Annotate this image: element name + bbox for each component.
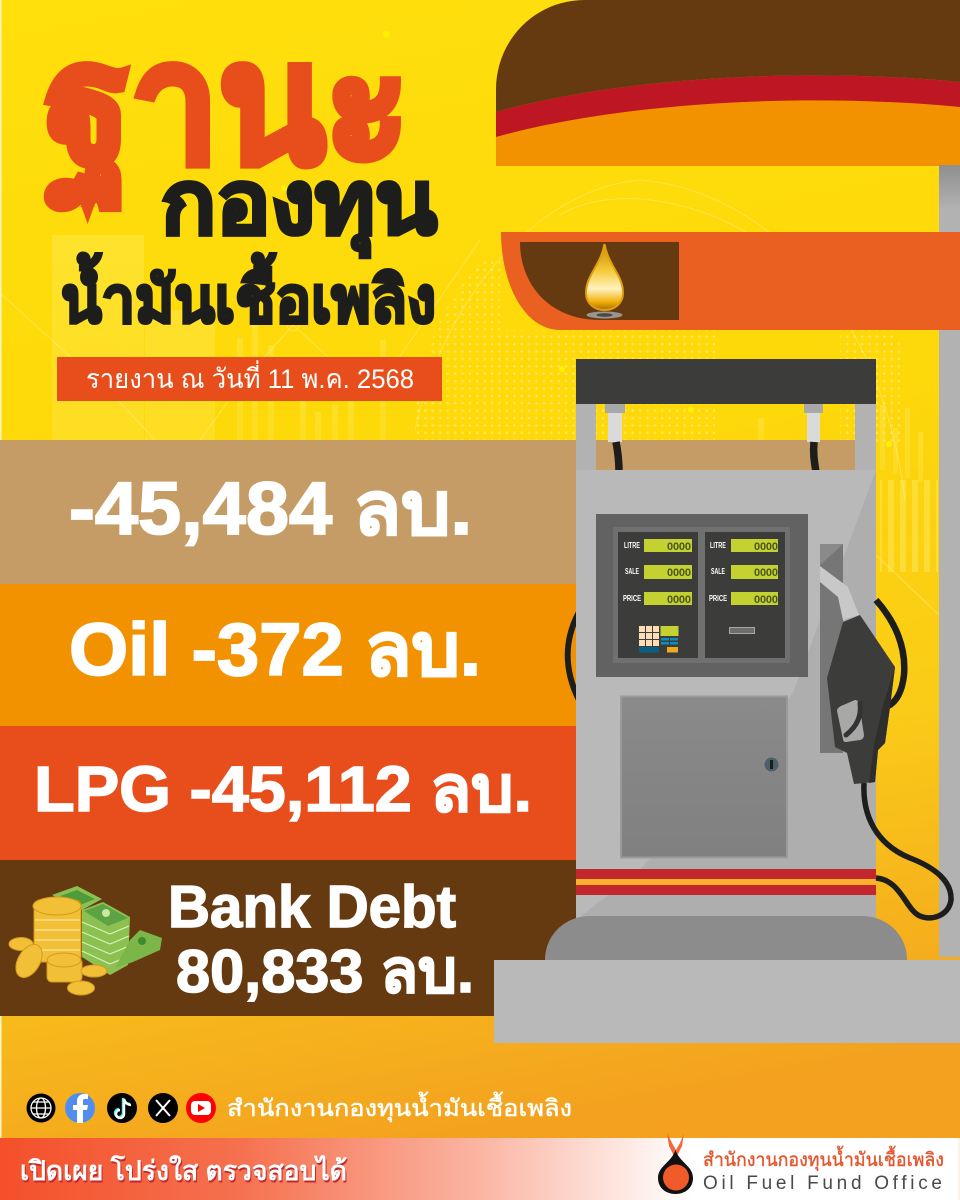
panel: LPG balance: LPG -45,112 ลบ. (34, 753, 532, 825)
icon: youtube (186, 1093, 216, 1123)
footer bar (0, 1133, 960, 1200)
heading: น้ำมันเชื้อเพลิง: น้ำมันเชื้อเพลิง (61, 253, 436, 336)
station pole (939, 165, 960, 957)
report date banner (57, 357, 442, 401)
panel: bank debt: 80,833 ลบ. (176, 938, 474, 1005)
display panel: LITRE (710, 541, 726, 550)
panel: total balance: -45,484 ลบ. (69, 467, 472, 550)
hose: left loop (568, 612, 579, 700)
hose: lower loop (864, 783, 951, 918)
icon: oil drop (586, 244, 623, 318)
display panel: LITRE (624, 541, 640, 550)
pump pillars (576, 404, 876, 474)
display panel: SALE (625, 567, 639, 576)
icon: website (26, 1094, 56, 1122)
fuel pump (494, 359, 960, 1043)
footer slogan: เปิดเผย โปร่งใส ตรวจสอบได้ (20, 1154, 347, 1186)
display panel (596, 514, 808, 677)
report date banner: รายงาน ณ วันที่ 11 พ.ค. 2568 (86, 360, 414, 394)
door lock (764, 758, 778, 772)
display panel: 0000 (667, 541, 691, 553)
panel: LPG balance (0, 726, 577, 860)
card slot (730, 628, 754, 634)
icon: coins and banknotes (9, 886, 162, 995)
social media row (26, 1092, 572, 1123)
keypad (639, 626, 678, 652)
hose connectors (605, 404, 823, 472)
nozzle handle (827, 615, 895, 784)
heading: กองทุน: กองทุน (161, 153, 437, 258)
stripes (576, 869, 876, 895)
pump cap (576, 359, 876, 404)
pump plinth (494, 960, 960, 1043)
fuel station roof (496, 0, 960, 166)
logo: oil fuel fund office: สำนักงานกองทุนน้ำมันเชื้อเพลิง (703, 1146, 944, 1172)
cabinet door (621, 696, 787, 858)
logo: oil fuel fund office (658, 1133, 944, 1194)
pump body (576, 470, 876, 960)
display panel: 0000 (754, 541, 778, 553)
display panel: 0000 (667, 567, 691, 579)
pump base dome (545, 916, 907, 960)
display panel: 0000 (754, 594, 778, 606)
hose: right loop (876, 600, 904, 706)
display panel: 0000 (754, 567, 778, 579)
icon: x (148, 1093, 178, 1123)
panel: total balance (0, 440, 856, 584)
panel: oil balance: Oil -372 ลบ. (69, 608, 481, 691)
display panel: SALE (711, 567, 725, 576)
icon: facebook (65, 1093, 95, 1123)
display panel: 0000 (667, 594, 691, 606)
panel: bank debt: Bank Debt (168, 874, 456, 940)
footer slogan: เปิดเผย โปร่งใส ตรวจสอบได้ (21, 1156, 348, 1188)
icon: tiktok (107, 1093, 137, 1123)
display panel: PRICE (709, 594, 727, 603)
nozzle spout (820, 566, 859, 620)
panel: bank debt (0, 860, 577, 1016)
nozzle holder (820, 544, 843, 753)
panel: oil balance (0, 584, 577, 726)
heading: ฐานะ: ฐานะ (45, 10, 409, 213)
logo: oil fuel fund office: Oil Fuel Fund Office (703, 1173, 942, 1194)
social label: สำนักงานกองทุนน้ำมันเชื้อเพลิง (227, 1092, 572, 1122)
station sign (501, 232, 960, 330)
display panel: PRICE (623, 594, 641, 603)
